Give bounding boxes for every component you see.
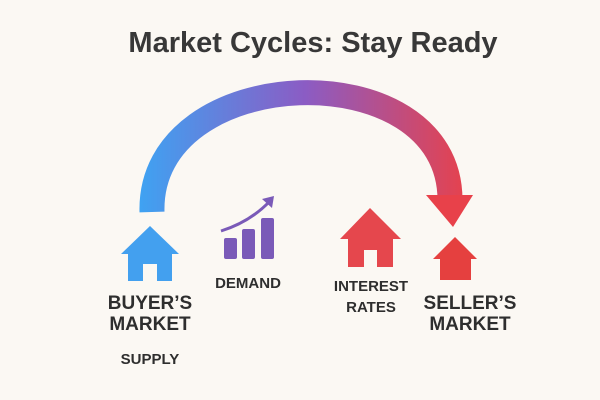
label: interest rates [334, 278, 408, 316]
icon: red house middle [340, 208, 401, 268]
label: interest rates: INTEREST [334, 278, 408, 295]
arrow: cycle arc [152, 93, 473, 227]
label: buyer's market: MARKET [109, 314, 191, 335]
title: Market Cycles: Stay Ready [128, 27, 498, 59]
label: buyer's market [108, 293, 192, 335]
label: demand: DEMAND [215, 275, 281, 292]
icon: bar chart with arrow [221, 196, 274, 259]
icon: blue house [121, 226, 179, 282]
label: seller's market: SELLER’S [424, 293, 516, 314]
label: supply: SUPPLY [121, 351, 179, 368]
label: buyer's market: BUYER’S [108, 293, 192, 314]
label: seller's market [424, 293, 516, 335]
label: seller's market: MARKET [429, 314, 511, 335]
label: interest rates: RATES [346, 299, 396, 316]
icon: red house right [433, 237, 477, 280]
